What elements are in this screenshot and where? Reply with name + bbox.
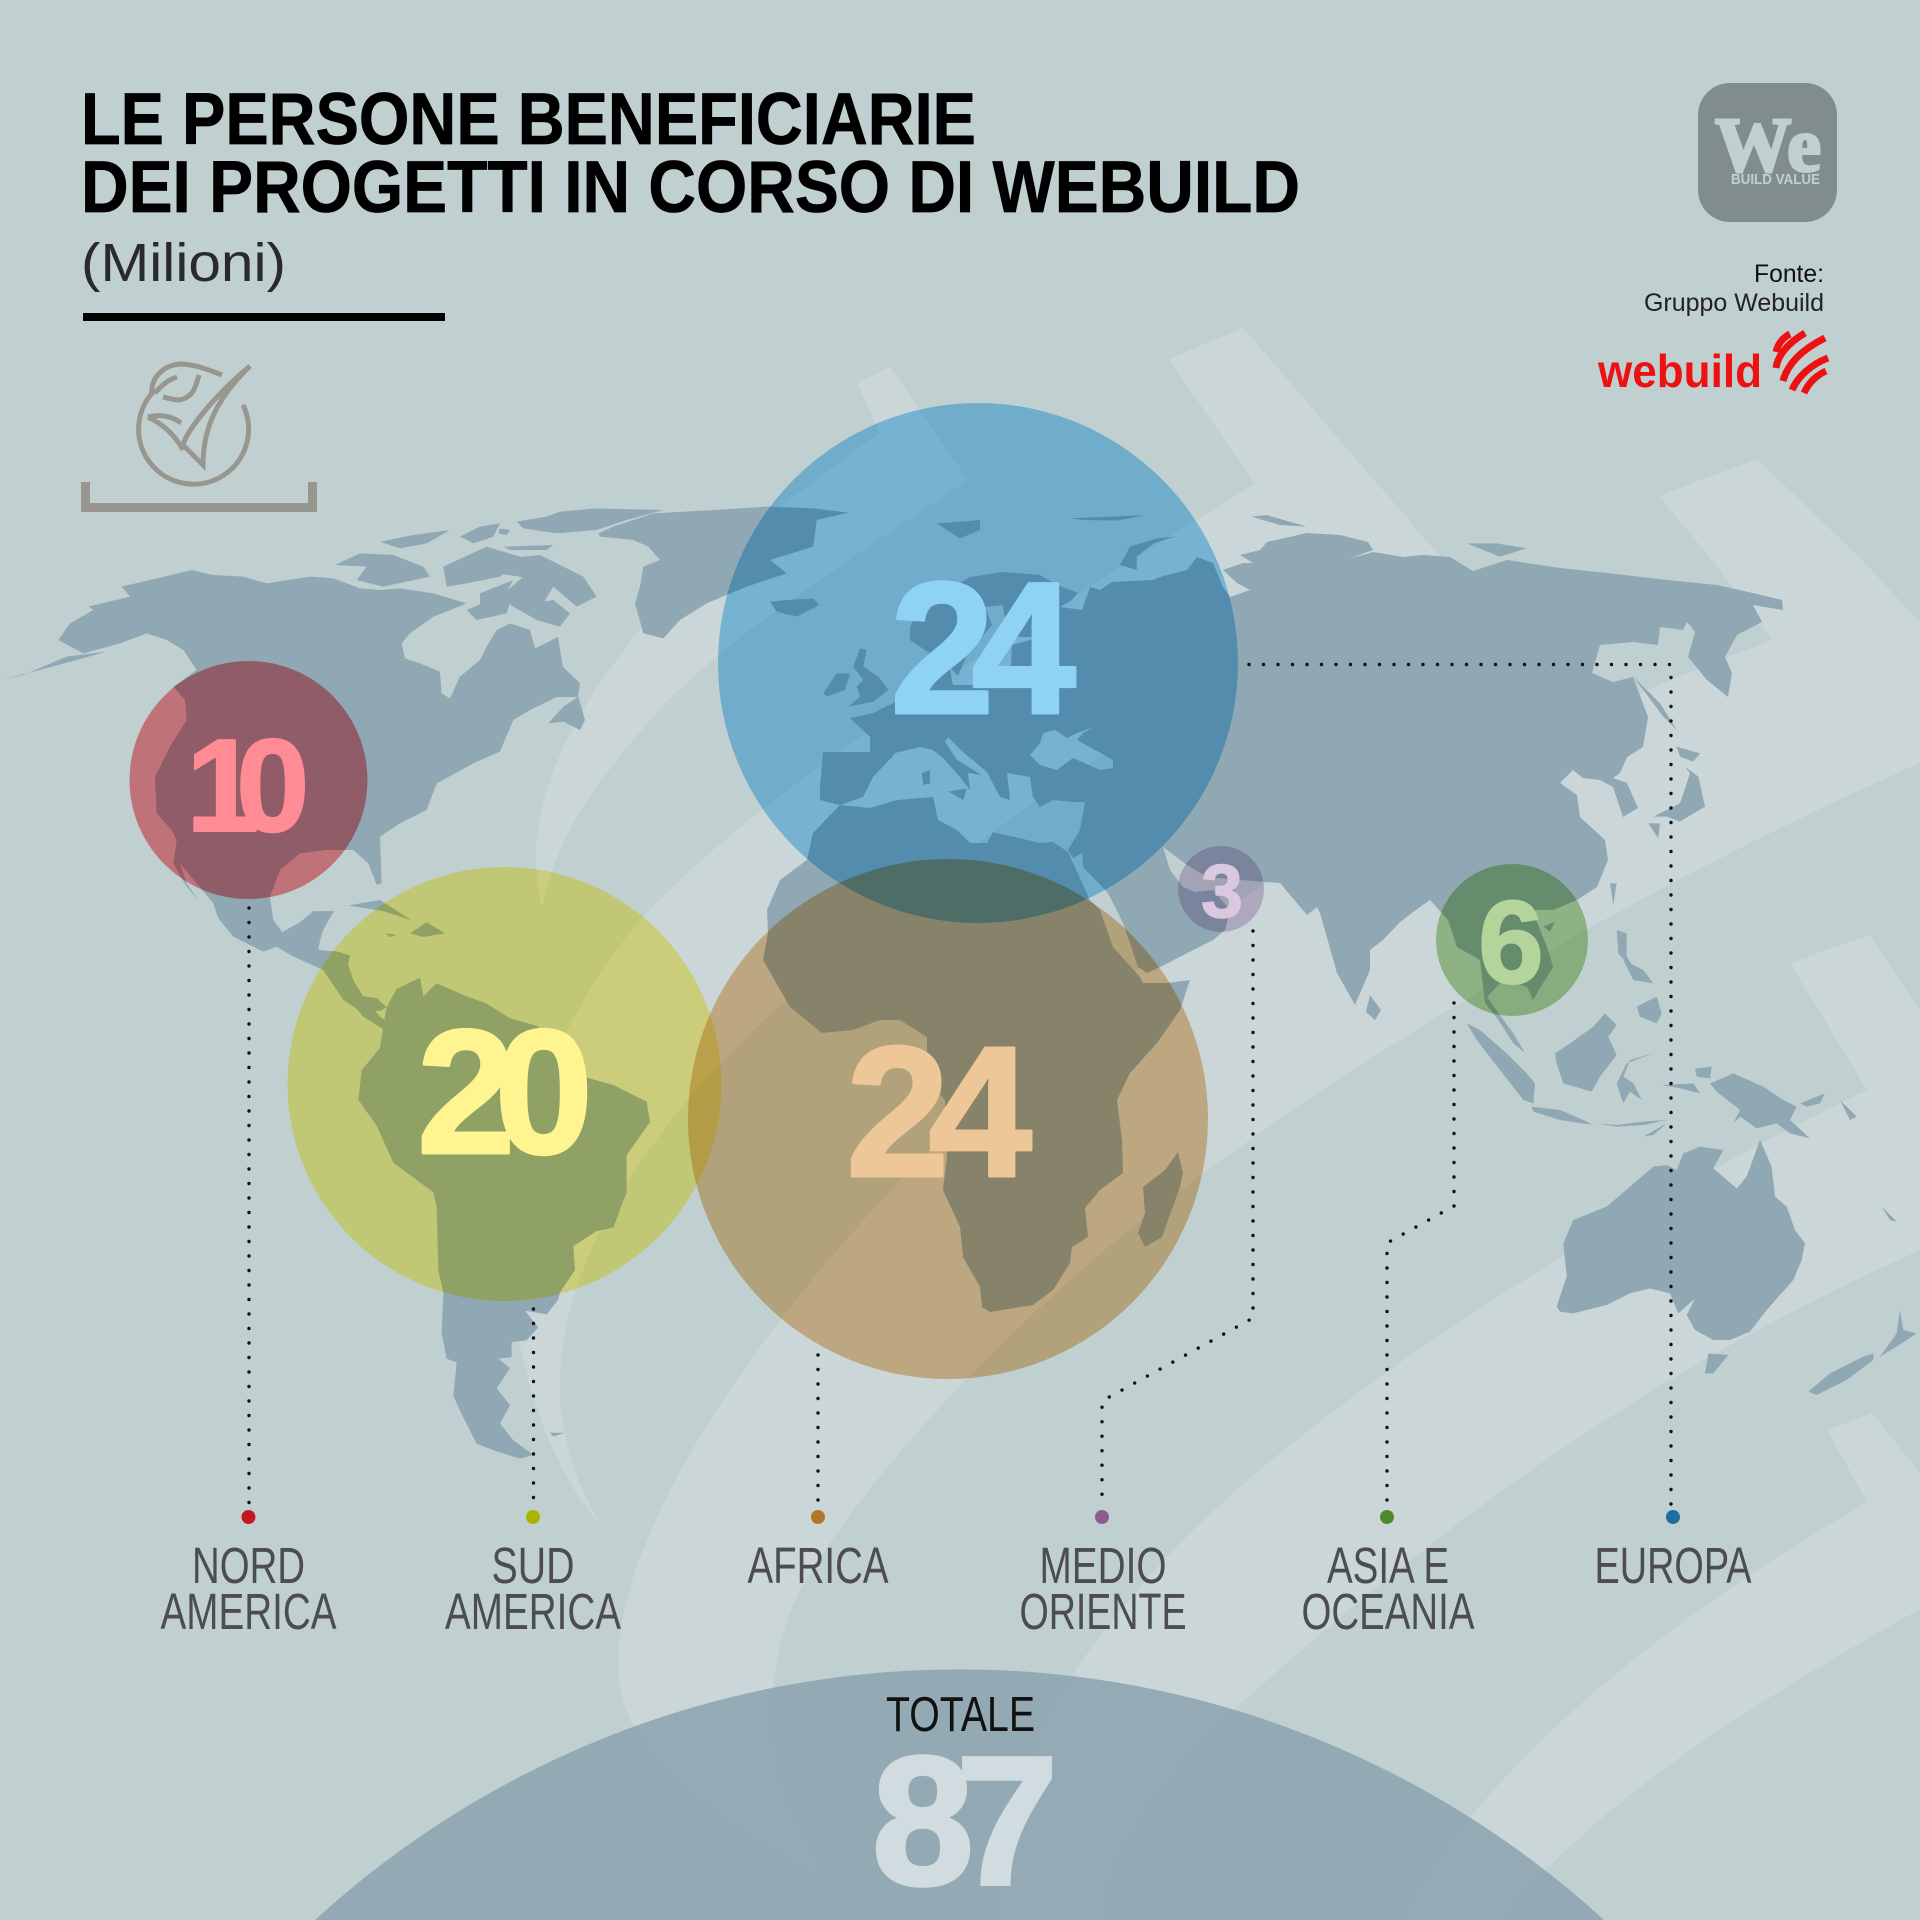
map: Arctic Canada and Greenland	[480, 507, 980, 638]
bubble: Nord America	[130, 661, 368, 899]
bubble: Europa: 24	[890, 543, 1076, 753]
logo: We Build Value: BUILD VALUE	[1731, 171, 1820, 188]
dotted leader lines	[249, 664, 1671, 1505]
total dome	[315, 1669, 1604, 1920]
source: Gruppo Webuild	[1644, 289, 1824, 317]
bubble: Nord America: 10	[186, 712, 309, 859]
subtitle: (Milioni)	[81, 233, 286, 293]
region labels	[160, 1510, 1752, 1640]
map: Africa	[763, 797, 1190, 1312]
label: Sud America: SUD	[492, 1537, 574, 1594]
bubble: Medio Oriente	[1178, 846, 1264, 933]
map: North America	[2, 523, 580, 1053]
label: Europa: EUROPA	[1594, 1537, 1752, 1594]
map: Madagascar	[1138, 1152, 1183, 1247]
total: 87	[872, 1718, 1058, 1920]
leader: Nord America	[247, 908, 251, 1505]
bubble: Medio Oriente: 3	[1201, 849, 1243, 933]
leader: Africa	[816, 1355, 820, 1505]
label: Asia e Oceania: ASIA E	[1327, 1537, 1449, 1594]
label: Nord America: AMERICA	[160, 1583, 336, 1640]
label: Sud America	[445, 1510, 621, 1640]
bubble: Asia e Oceania: 6	[1478, 877, 1544, 1009]
logo: We Build Value	[1698, 83, 1837, 222]
title	[81, 79, 1300, 228]
bubble: Sud America	[288, 867, 722, 1301]
bubble: Europa	[718, 403, 1238, 923]
total: TOTALE	[886, 1688, 1035, 1742]
bubble: Africa	[688, 859, 1208, 1379]
leader: Asia e Oceania	[1387, 1003, 1454, 1505]
label: Medio Oriente: ORIENTE	[1020, 1583, 1186, 1640]
logo: We Build Value: We	[1715, 102, 1821, 188]
map: Newfoundland and British Isles	[548, 648, 967, 800]
logo: webuild: webuild	[1597, 345, 1762, 397]
leader: Sud America	[532, 1309, 535, 1505]
map: East Asian islands	[1543, 677, 1705, 977]
icon: leaf and tick over tray	[86, 364, 312, 508]
label: Nord America	[160, 1510, 336, 1640]
label: Asia e Oceania	[1302, 1510, 1474, 1640]
label: Africa: AFRICA	[748, 1537, 888, 1594]
label: Asia e Oceania: OCEANIA	[1302, 1583, 1474, 1640]
label: Medio Oriente: MEDIO	[1040, 1537, 1166, 1594]
label: Africa	[748, 1510, 888, 1594]
map: Eurasia	[820, 533, 1783, 1053]
title: DEI PROGETTI IN CORSO DI WEBUILD	[81, 147, 1300, 228]
label: Nord America: NORD	[192, 1537, 305, 1594]
label: Sud America: AMERICA	[445, 1583, 621, 1640]
label: Europa	[1594, 1510, 1752, 1594]
map: South America	[280, 900, 650, 1459]
map: Southeast Asia and Oceania	[1467, 960, 1917, 1395]
bubble: Asia e Oceania	[1436, 864, 1588, 1016]
label: Medio Oriente	[1020, 1510, 1186, 1640]
leader: Europa	[1249, 664, 1671, 1505]
title: LE PERSONE BENEFICIARIE	[81, 79, 976, 160]
world map	[2, 507, 1917, 1459]
logo: webuild	[1597, 333, 1828, 397]
leader: Medio Oriente	[1102, 931, 1253, 1505]
bubble: Sud America: 20	[417, 993, 593, 1191]
map: Russian Arctic islands	[1070, 515, 1527, 570]
source: Fonte:	[1754, 260, 1824, 288]
source	[1644, 260, 1824, 317]
title rule	[83, 313, 445, 321]
bubble: Africa: 24	[846, 1009, 1032, 1216]
map: Sri Lanka	[1366, 995, 1381, 1020]
